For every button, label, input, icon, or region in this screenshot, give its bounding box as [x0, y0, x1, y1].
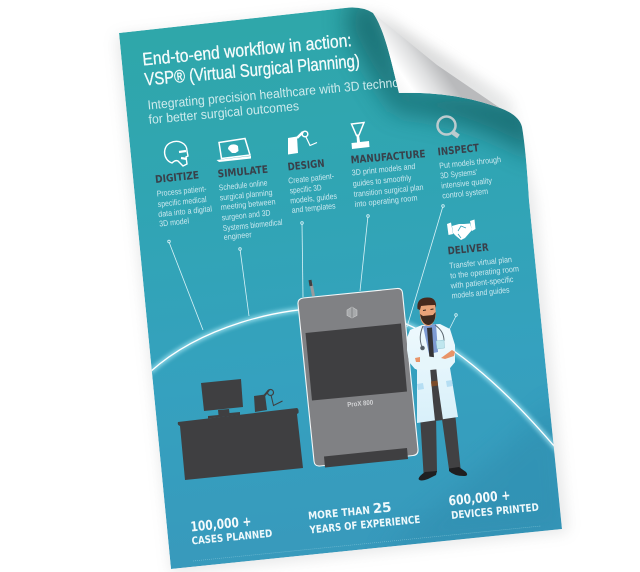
heading: manufacture: MANUFACTURE [350, 148, 426, 166]
text: deliver: Transfer virtual plan [449, 255, 513, 270]
glowing horizon arc [150, 308, 560, 453]
coat pockets [417, 380, 453, 390]
text: inspect: 3D Systems' [440, 168, 478, 180]
printer body [298, 288, 418, 466]
step: deliver [447, 220, 519, 300]
step: inspect [437, 116, 502, 200]
text: manufacture: 3D print models and [351, 162, 416, 177]
fold shadow on page [345, 0, 538, 160]
text: design [288, 174, 337, 213]
model label: ProX 800 [347, 400, 374, 409]
text: simulate: Systems biomedical [222, 218, 283, 233]
page curl flap [373, 13, 500, 108]
text: simulate: surgical planning [219, 188, 273, 202]
text: manufacture [351, 162, 424, 209]
heading: deliver: DELIVER [447, 242, 489, 257]
step: design [287, 131, 337, 215]
title [143, 35, 359, 86]
crossed arms [408, 350, 455, 370]
badge [436, 340, 444, 349]
shirt [423, 324, 438, 354]
text: deliver: models and guides [451, 285, 510, 300]
stat: cases planned: CASES PLANNED [191, 528, 273, 547]
curl shadow on background [376, 12, 512, 108]
subtitle: Integrating precision healthcare with 3D technologies [147, 72, 432, 112]
antenna [310, 280, 314, 296]
monitor [201, 379, 243, 411]
text: digitize [157, 186, 212, 226]
text: simulate [218, 178, 283, 242]
text: inspect: Put models through [439, 155, 502, 170]
title: End-to-end workflow in action: [142, 30, 352, 69]
text: design: and templates [291, 201, 336, 215]
printer window [306, 324, 407, 400]
belt [431, 380, 438, 386]
stat: devices printed: DEVICES PRINTED [451, 502, 540, 522]
trousers [420, 412, 460, 473]
icon: handshake [447, 220, 476, 240]
subtitle: for better surgical outcomes [148, 98, 300, 127]
hair [417, 297, 436, 310]
step: manufacture [350, 122, 426, 209]
icon: magnifier [438, 116, 458, 136]
stethoscope [420, 325, 444, 350]
eyes [423, 309, 434, 310]
text: simulate: Schedule online [218, 178, 268, 192]
heading: inspect: INSPECT [437, 142, 480, 158]
logo [347, 307, 357, 318]
icon: print funnel [352, 122, 370, 149]
step: simulate [216, 138, 283, 242]
illustration: doctor [407, 297, 467, 480]
panel: poster page [119, 0, 570, 569]
lab coat [407, 324, 458, 423]
text: simulate: surgeon and 3D [221, 208, 271, 222]
illustration: ProX 800 printer [298, 280, 418, 468]
text: inspect: intensive quality [441, 176, 493, 190]
text: inspect: control system [442, 187, 489, 200]
shoes [418, 467, 467, 480]
connector lines [168, 205, 457, 330]
text: deliver [449, 255, 519, 300]
stat: devices printed [448, 488, 540, 522]
head [417, 297, 436, 326]
text: digitize: specific medical [157, 195, 207, 209]
text: simulate: engineer [223, 230, 252, 242]
icon: robot arm [288, 131, 317, 154]
stat: cases planned: 100,000 + [190, 514, 252, 535]
beard [420, 312, 436, 325]
step: digitize [155, 141, 213, 228]
icon: skull [165, 141, 188, 166]
heading: simulate: SIMULATE [217, 164, 269, 180]
text: manufacture: guides to smoothly [352, 173, 413, 188]
stat: years of experience [307, 500, 421, 537]
text: inspect [439, 155, 502, 200]
lower right shading [392, 407, 562, 546]
lower coat opening with trousers [430, 366, 443, 421]
printer base panel [324, 448, 408, 468]
text: deliver: to the operating room [450, 264, 519, 280]
text: manufacture: transition surgical plan [353, 183, 424, 199]
title: VSP® (Virtual Surgical Planning) [144, 51, 361, 89]
text: design: specific 3D [289, 183, 322, 195]
monitor stand [208, 409, 240, 418]
stat: years of experience: MORE THAN25 [307, 500, 392, 523]
desk [178, 408, 303, 480]
stat: years of experience: YEARS OF EXPERIENCE [308, 514, 421, 537]
text: simulate: meeting between [220, 197, 276, 212]
heading: digitize: DIGITIZE [155, 169, 200, 186]
stat: devices printed: 600,000 + [448, 488, 511, 509]
icon: laptop with skull [216, 138, 251, 162]
text: digitize: Process patient- [156, 184, 207, 198]
text: deliver: with patient-specific [449, 275, 514, 291]
text: digitize: data into a digital [158, 204, 213, 219]
illustration: desk with monitor and robot arm [178, 379, 303, 480]
text: design: Create patient- [288, 172, 335, 185]
desktop robot arm [254, 390, 282, 412]
subtitle [148, 79, 398, 124]
heading: design: DESIGN [287, 158, 325, 173]
page drop shadow [116, 10, 568, 572]
stat: cases planned [190, 514, 273, 547]
tie [427, 328, 434, 359]
text: manufacture: into operating room [354, 193, 418, 209]
text: digitize: 3D model [159, 216, 190, 228]
text: design: models, guides [290, 192, 337, 205]
